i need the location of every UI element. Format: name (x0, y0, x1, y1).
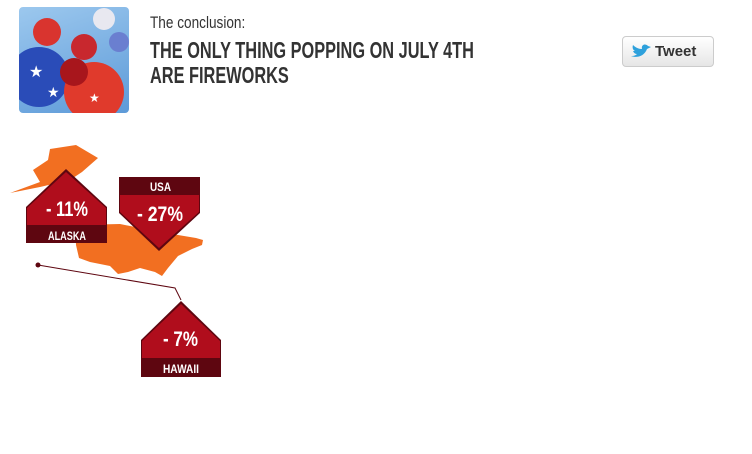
header image: balloons: ★ (47, 84, 60, 100)
icon: twitter bird (631, 44, 651, 57)
callout: usa: - 27% (137, 203, 183, 226)
callout: hawaii: - 7% (163, 328, 198, 351)
callout: hawaii: HAWAII (163, 362, 199, 376)
tweet button: Tweet (655, 43, 696, 60)
header image: balloons (19, 7, 129, 113)
callout: usa (119, 177, 200, 251)
title (150, 37, 474, 88)
callout: hawaii (141, 301, 221, 377)
map: alaska (10, 145, 98, 193)
header image: balloons: ★ (29, 64, 43, 81)
tweet button (622, 36, 714, 67)
subtitle: The conclusion: (150, 13, 245, 32)
callout: usa: USA (150, 180, 171, 194)
callout: alaska: - 11% (46, 198, 88, 221)
title: ARE FIREWORKS (150, 62, 289, 88)
callout: alaska (26, 169, 107, 243)
connector line to hawaii (36, 262, 181, 300)
header image: balloons: ★ (89, 91, 100, 105)
callout: alaska: ALASKA (48, 229, 86, 243)
map: mainland usa (75, 224, 203, 276)
title: THE ONLY THING POPPING ON JULY 4TH (150, 37, 474, 63)
